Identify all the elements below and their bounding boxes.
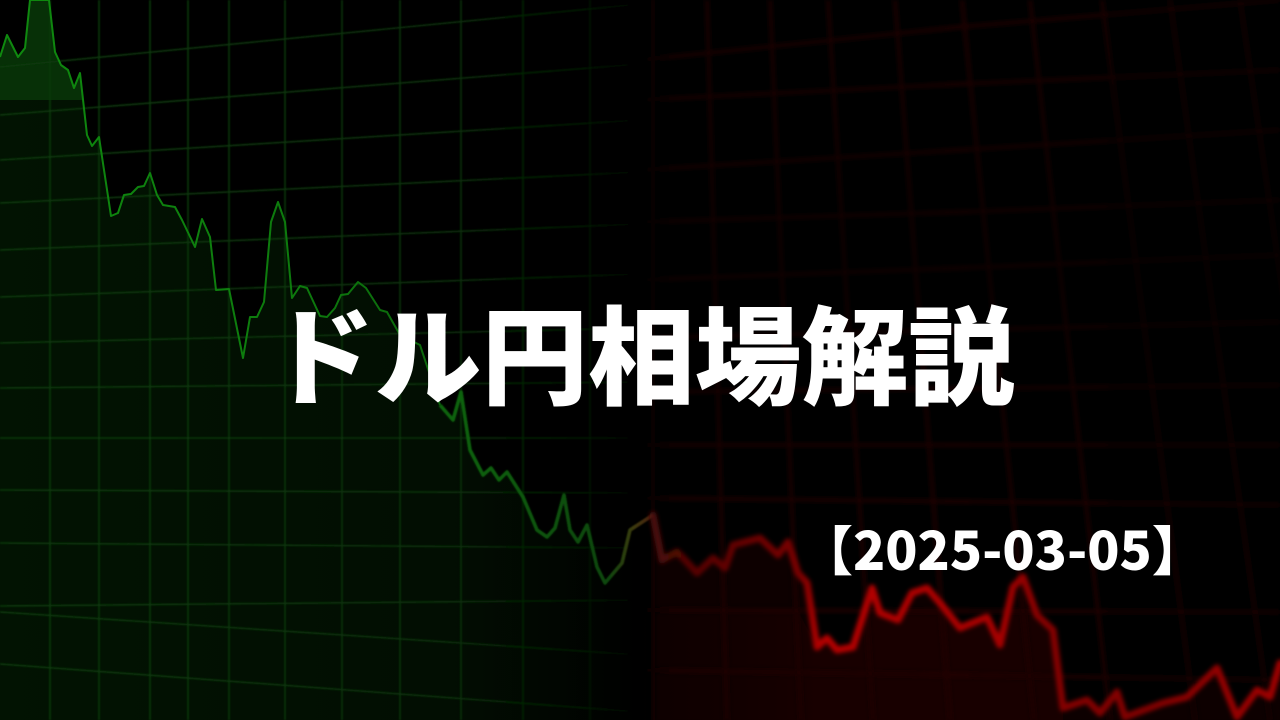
green price line, thin upper section <box>0 0 440 405</box>
title: ドル円相場解説 <box>268 272 1015 427</box>
green price line, blurred lower section <box>440 392 653 583</box>
green area fill, lower body <box>0 100 530 720</box>
red price line <box>653 515 1280 717</box>
green grid <box>0 0 640 720</box>
date label: 【2025-03-05】 <box>800 510 1205 586</box>
red area fill <box>653 515 1280 720</box>
red grid <box>640 0 1280 720</box>
green area fill, upper band <box>0 1 82 100</box>
red brighter band below y=609 <box>774 614 1063 720</box>
